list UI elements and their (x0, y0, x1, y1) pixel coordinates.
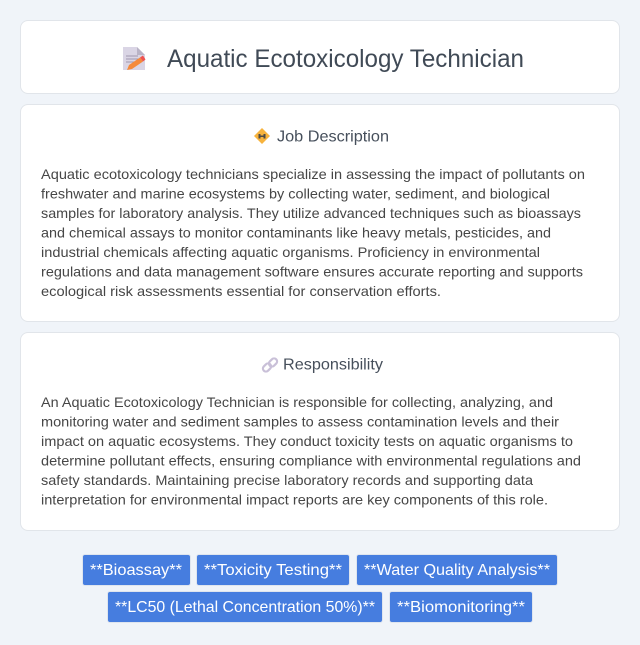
text: job description paragraph: and chemical assays to monitor contaminants like heavy metals, pesticides, and (41, 224, 551, 240)
text: job description paragraph: Aquatic ecotoxicology technicians specialize in assessing the impact of pollutants on (41, 166, 585, 182)
text: responsibility paragraph: An Aquatic Ecotoxicology Technician is responsible for collecting, analyzing, and (41, 394, 553, 410)
text: job description paragraph: regulations and data management software ensures accurate reporting and supports (41, 264, 583, 280)
text: job description paragraph: ecological risk assessments essential for conservation efforts. (41, 283, 441, 299)
panel: job description (20, 104, 620, 322)
heading: job description: Job Description (277, 128, 389, 146)
panel: title (20, 20, 620, 94)
tag: Toxicity Testing: **Toxicity Testing** (204, 562, 342, 579)
icon: diamond sign (254, 128, 270, 144)
text: responsibility paragraph: safety standards. Maintaining precise laboratory records and supporting data (41, 472, 533, 488)
panel: responsibility (20, 332, 620, 531)
tag: Bioassay: **Bioassay** (90, 562, 182, 579)
tag: Bioassay (82, 554, 191, 586)
tag: Toxicity Testing (196, 554, 350, 586)
text: job description paragraph: industrial chemicals affecting aquatic organisms. Proficiency in environmental (41, 244, 540, 260)
title text: Aquatic Ecotoxicology Technician (167, 45, 524, 73)
text: job description paragraph: samples for laboratory analysis. They utilize advanced techniques such as bioassays (41, 205, 581, 221)
tag: Water Quality Analysis (356, 554, 558, 586)
text: responsibility paragraph: interpretation for environmental impact reports are key components of this role. (41, 492, 548, 508)
tag: Water Quality Analysis: **Water Quality Analysis** (364, 562, 550, 579)
tag: Biomonitoring (389, 591, 533, 623)
text: responsibility paragraph: impact on aquatic ecosystems. They conduct toxicity tests on aquatic organisms to (41, 433, 573, 449)
text: responsibility paragraph: monitoring water and sediment samples to assess contamination levels and their (41, 414, 559, 430)
icon: document with pencil (123, 47, 146, 70)
text: job description paragraph: freshwater and marine ecosystems by collecting water, sediment, and biological (41, 186, 550, 202)
tag: LC50: **LC50 (Lethal Concentration 50%)** (115, 599, 375, 616)
text: responsibility paragraph: determine pollutant effects, ensuring compliance with environmental regulations and (41, 452, 581, 468)
tag: LC50 (107, 591, 383, 623)
text: responsibility paragraph (41, 394, 581, 508)
text: job description paragraph (41, 166, 585, 299)
tag: Biomonitoring: **Biomonitoring** (397, 599, 525, 616)
heading: responsibility: Responsibility (283, 356, 383, 374)
icon: chain link (262, 357, 278, 373)
